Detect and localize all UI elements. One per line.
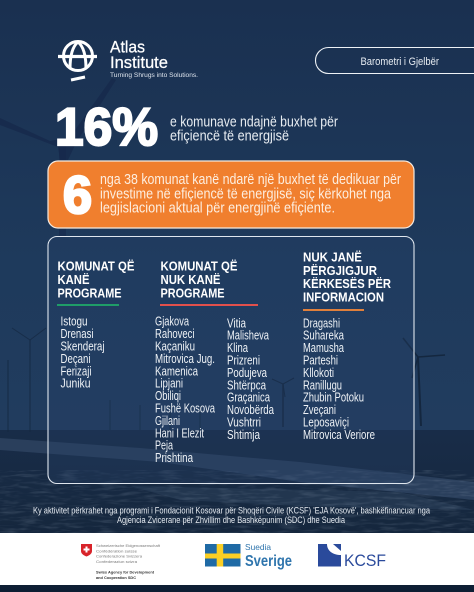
logo: KCSF: [318, 544, 386, 570]
footer note: funding statement: Agjencia Zvicerane për Zhvillim dhe Bashkëpunim (SDC) dhe Suedia: [117, 515, 345, 525]
column: municipalities with programs: Juniku: [60, 377, 91, 391]
column: municipalities without programs: Graçanica: [227, 391, 270, 405]
column: municipalities without programs: Vushtrri: [227, 416, 261, 430]
column: did not respond to information request: Leposaviçi: [303, 416, 349, 430]
column: did not respond to information request: Kllokoti: [303, 366, 334, 380]
logo: Atlas Institute: [58, 38, 198, 80]
logo: Swiss Agency for Development and Cooperation: [81, 544, 160, 580]
column: did not respond to information request: Ranillugu: [303, 378, 342, 392]
column: municipalities without programs: [155, 259, 274, 465]
column: municipalities with programs: Ferizaji: [60, 364, 92, 378]
label pill: Barometri i Gjelbër: [316, 48, 474, 74]
callout: orange statistic: investime në efiçiencë të energjisë, siç kërkohet nga: [100, 186, 392, 202]
column: municipalities without programs: KOMUNAT QË: [160, 259, 238, 274]
column: municipalities without programs: Kamenica: [155, 364, 198, 378]
logo: Sweden flag and wordmark: Suedia: [245, 542, 271, 552]
column: municipalities with programs: Skenderaj: [60, 340, 104, 354]
column: municipalities with programs: KANË: [58, 272, 90, 287]
logo: Swiss Agency for Development and Cooperation: Confederaziun svizra: [96, 560, 137, 564]
column: did not respond to information request: Zhubin Potoku: [303, 391, 364, 405]
label pill: Barometri i Gjelbër: Barometri i Gjelbër: [360, 56, 439, 68]
callout: orange statistic: [48, 161, 414, 228]
column: municipalities without programs: PROGRAME: [160, 286, 224, 300]
logo: Swiss Agency for Development and Cooperation: and Cooperation SDC: [96, 576, 136, 580]
column: municipalities without programs: Prizreni: [227, 354, 260, 368]
logo: Atlas Institute: Turning Shrugs into Solutions.: [110, 72, 198, 79]
column: municipalities with programs: KOMUNAT QË: [58, 259, 134, 274]
column: municipalities with programs: PROGRAME: [58, 286, 122, 300]
column: municipalities without programs: Malisheva: [227, 329, 269, 343]
column: municipalities with programs: Deçani: [60, 352, 90, 366]
column: did not respond to information request: NUK JANË: [303, 250, 362, 265]
column: municipalities without programs: Kaçaniku: [155, 340, 195, 354]
column: did not respond to information request: Mamusha: [303, 341, 344, 355]
logo: Atlas Institute: Atlas: [110, 38, 145, 57]
statistic: 16%: efiçiencë të energjisë: [170, 129, 289, 145]
column: municipalities without programs: Fushë Kosova: [155, 402, 215, 416]
column: municipalities without programs: Shtërpca: [227, 378, 266, 392]
column: municipalities without programs: Hani I Elezit: [155, 426, 204, 440]
column: municipalities without programs: Mitrovica Jug.: [155, 352, 215, 366]
column: did not respond to information request: INFORMACION: [303, 290, 384, 304]
footer note: funding statement: [33, 506, 430, 525]
column: did not respond to information request: Zveçani: [303, 403, 336, 417]
logo: Swiss Agency for Development and Cooperation: Schweizerische Eidgenossenschaft: [96, 544, 160, 548]
sponsor band: [0, 533, 474, 585]
logo: Sweden flag and wordmark: [205, 542, 292, 570]
column: municipalities with programs: Istogu: [60, 315, 88, 329]
column: did not respond to information request: Dragashi: [303, 316, 340, 330]
logo: Sweden flag and wordmark: Sverige: [245, 553, 292, 570]
column: did not respond to information request: KËRKESËS PËR: [303, 276, 391, 291]
column: municipalities without programs: Lipjani: [155, 377, 183, 391]
callout: orange statistic: legjislacioni aktual për energjinë efiçiente.: [100, 200, 335, 216]
panel: municipality lists: [48, 236, 414, 484]
callout: orange statistic: 6: [63, 166, 92, 225]
column: municipalities with programs: [57, 259, 134, 391]
column: municipalities without programs: Obiliqi: [155, 389, 181, 403]
column: municipalities without programs: Prishtina: [155, 451, 193, 465]
column: municipalities with programs: Drenasi: [60, 327, 94, 341]
statistic: 16%: 16%: [55, 98, 158, 157]
column: municipalities without programs: Podujeva: [227, 366, 267, 380]
column: municipalities without programs: NUK KANË: [160, 272, 220, 287]
column: municipalities without programs: Novobërda: [227, 403, 274, 417]
column: did not respond to information request: Parteshi: [303, 354, 338, 368]
icon: globe: [58, 42, 97, 80]
column: municipalities without programs: Shtimja: [227, 428, 260, 442]
logo: Atlas Institute: Institute: [110, 53, 168, 72]
column: municipalities without programs: Peja: [155, 439, 173, 453]
column: municipalities without programs: Gjakova: [155, 315, 189, 329]
column: municipalities without programs: Gjilani: [155, 414, 180, 428]
column: did not respond to information request: Mitrovica Veriore: [303, 428, 375, 442]
statistic: 16%: e komunave ndajnë buxhet për: [170, 115, 338, 131]
logo: Swiss Agency for Development and Cooperation: Confederazione Svizzera: [96, 554, 142, 558]
column: did not respond to information request: Suhareka: [303, 329, 344, 343]
statistic: 16%: [55, 98, 338, 157]
turbines: [8, 328, 445, 432]
column: municipalities without programs: Vitia: [227, 316, 246, 330]
logo: Swiss Agency for Development and Cooperation: Swiss Agency for Development: [96, 570, 155, 574]
column: did not respond to information request: PËRGJIGJUR: [303, 263, 377, 278]
column: did not respond to information request: [303, 250, 391, 442]
logo: KCSF: KCSF: [344, 551, 386, 570]
column: municipalities without programs: Rahoveci: [155, 327, 194, 341]
logo: Swiss Agency for Development and Cooperation: Confédération suisse: [96, 550, 137, 554]
column: municipalities without programs: Klina: [227, 341, 248, 355]
callout: orange statistic: nga 38 komunat kanë ndarë një buxhet të dedikuar për: [100, 172, 401, 188]
